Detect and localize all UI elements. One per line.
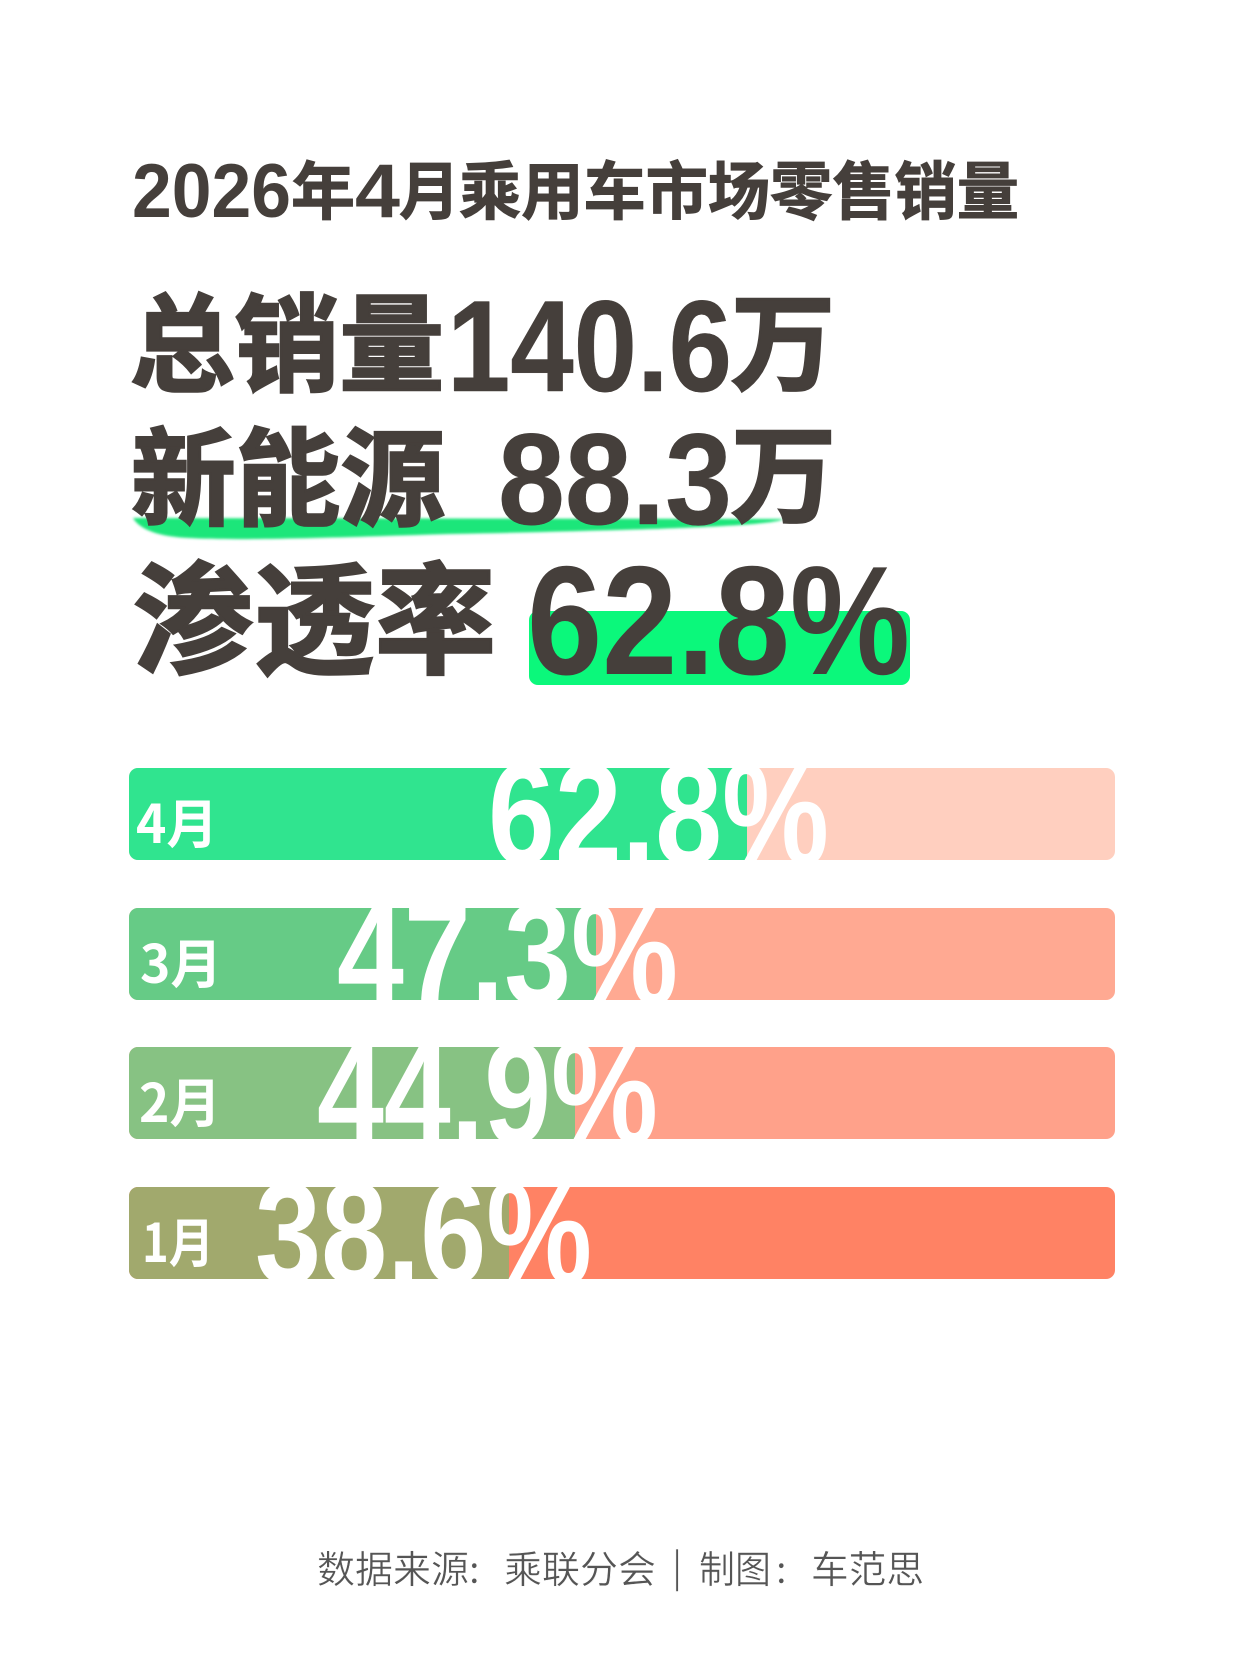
value: 47.3%: 47.3% bbox=[337, 873, 678, 1035]
footer source credit: 制图 bbox=[699, 1539, 771, 1594]
headline: penetration rate bbox=[133, 524, 910, 707]
footer source credit: | bbox=[672, 1537, 682, 1592]
value: 62.8%: 62.8% bbox=[488, 733, 829, 895]
headline: new energy sales: 88.3 bbox=[498, 406, 732, 552]
title: 2026 bbox=[132, 149, 291, 234]
headline: new energy sales bbox=[131, 391, 836, 552]
label: 4月: 4月 bbox=[136, 783, 218, 859]
headline: total sales: 总销量 bbox=[130, 260, 444, 414]
headline: total sales: 140.6 bbox=[447, 273, 732, 419]
label: 3月: 3月 bbox=[140, 923, 222, 999]
title bbox=[132, 142, 1019, 234]
bar: March bbox=[129, 873, 1115, 1035]
footer source credit: 车范思 bbox=[811, 1539, 924, 1594]
footer source credit: 乘联分会 bbox=[504, 1539, 656, 1594]
footer source credit: : bbox=[469, 1539, 480, 1594]
value: 38.6%: 38.6% bbox=[255, 1152, 592, 1314]
label: 1月: 1月 bbox=[142, 1202, 214, 1278]
headline: new energy sales: 万 bbox=[731, 391, 836, 545]
headline: new energy sales: 新能源 bbox=[131, 394, 445, 548]
value: 44.9%: 44.9% bbox=[317, 1012, 658, 1174]
headline: total sales bbox=[130, 259, 835, 419]
headline: penetration rate: 62.8% bbox=[527, 534, 910, 707]
footer source credit bbox=[317, 1537, 924, 1594]
bar: April bbox=[129, 733, 1115, 895]
title: 月 bbox=[399, 142, 460, 233]
bar: January bbox=[129, 1152, 1115, 1314]
bar: February bbox=[129, 1012, 1115, 1174]
label: 2月: 2月 bbox=[139, 1062, 221, 1138]
green brush underline bbox=[133, 518, 783, 539]
title: 年 bbox=[291, 142, 355, 233]
highlight box behind penetration rate bbox=[529, 611, 910, 685]
footer source credit: : bbox=[776, 1539, 787, 1594]
title: 乘用车市场零售销量 bbox=[459, 142, 1019, 233]
headline: total sales: 万 bbox=[731, 259, 835, 413]
headline: penetration rate: 渗透率 bbox=[133, 524, 496, 699]
title: 4 bbox=[355, 149, 400, 234]
footer source credit: 数据来源 bbox=[317, 1539, 469, 1594]
